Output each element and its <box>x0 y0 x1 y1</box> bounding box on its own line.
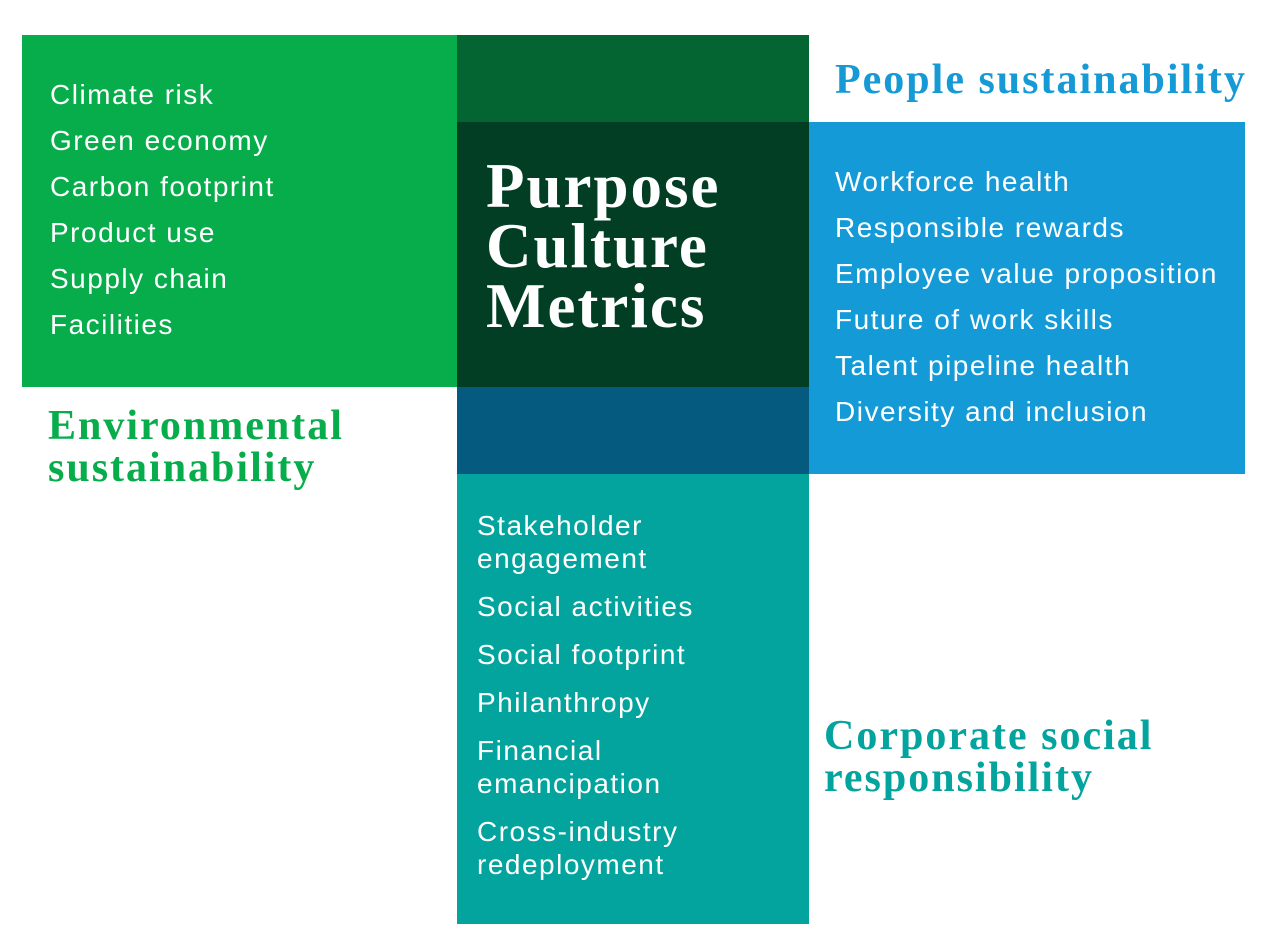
list: people items: Employee value proposition <box>835 258 1218 289</box>
heading: environmental sustainability: sustainability <box>48 445 316 491</box>
heading: environmental sustainability <box>48 403 344 491</box>
heading: environmental sustainability: Environmental <box>48 403 344 449</box>
list: environmental items: Green economy <box>50 125 269 156</box>
list: CSR items: Cross-industry <box>477 816 678 847</box>
list: CSR items: emancipation <box>477 768 662 799</box>
list: environmental items: Product use <box>50 217 216 248</box>
list: CSR items: engagement <box>477 543 648 574</box>
title: Metrics <box>486 271 706 341</box>
list: environmental items: Climate risk <box>50 79 214 110</box>
list: people items: Diversity and inclusion <box>835 396 1148 427</box>
list: CSR items: Social activities <box>477 591 694 622</box>
list: environmental items <box>50 79 275 340</box>
list: environmental items: Supply chain <box>50 263 228 294</box>
list: people items: Responsible rewards <box>835 212 1125 243</box>
list: environmental items: Carbon footprint <box>50 171 275 202</box>
list: CSR items: Financial <box>477 735 603 766</box>
heading: corporate social responsibility <box>824 713 1153 801</box>
list: people items: Future of work skills <box>835 304 1114 335</box>
block: dark green top <box>457 35 809 122</box>
list: CSR items: redeployment <box>477 849 665 880</box>
list: CSR items: Social footprint <box>477 639 686 670</box>
list: CSR items: Stakeholder <box>477 510 643 541</box>
panel: environmental <box>22 35 457 387</box>
heading: corporate social responsibility: Corporate social <box>824 713 1153 759</box>
heading: corporate social responsibility: responsibility <box>824 755 1094 801</box>
list: CSR items: Philanthropy <box>477 687 651 718</box>
block: dark blue <box>457 387 809 474</box>
list: people items <box>835 166 1218 427</box>
title: Culture <box>486 211 709 281</box>
panel: people <box>809 122 1245 474</box>
title: Purpose <box>486 151 720 221</box>
title <box>486 151 720 341</box>
list: people items: Talent pipeline health <box>835 350 1131 381</box>
list: environmental items: Facilities <box>50 309 174 340</box>
panel: center title <box>457 122 809 387</box>
list: people items: Workforce health <box>835 166 1070 197</box>
panel: CSR <box>457 474 809 924</box>
heading: people sustainability: People sustainability <box>835 57 1247 103</box>
list: CSR items <box>477 510 694 880</box>
